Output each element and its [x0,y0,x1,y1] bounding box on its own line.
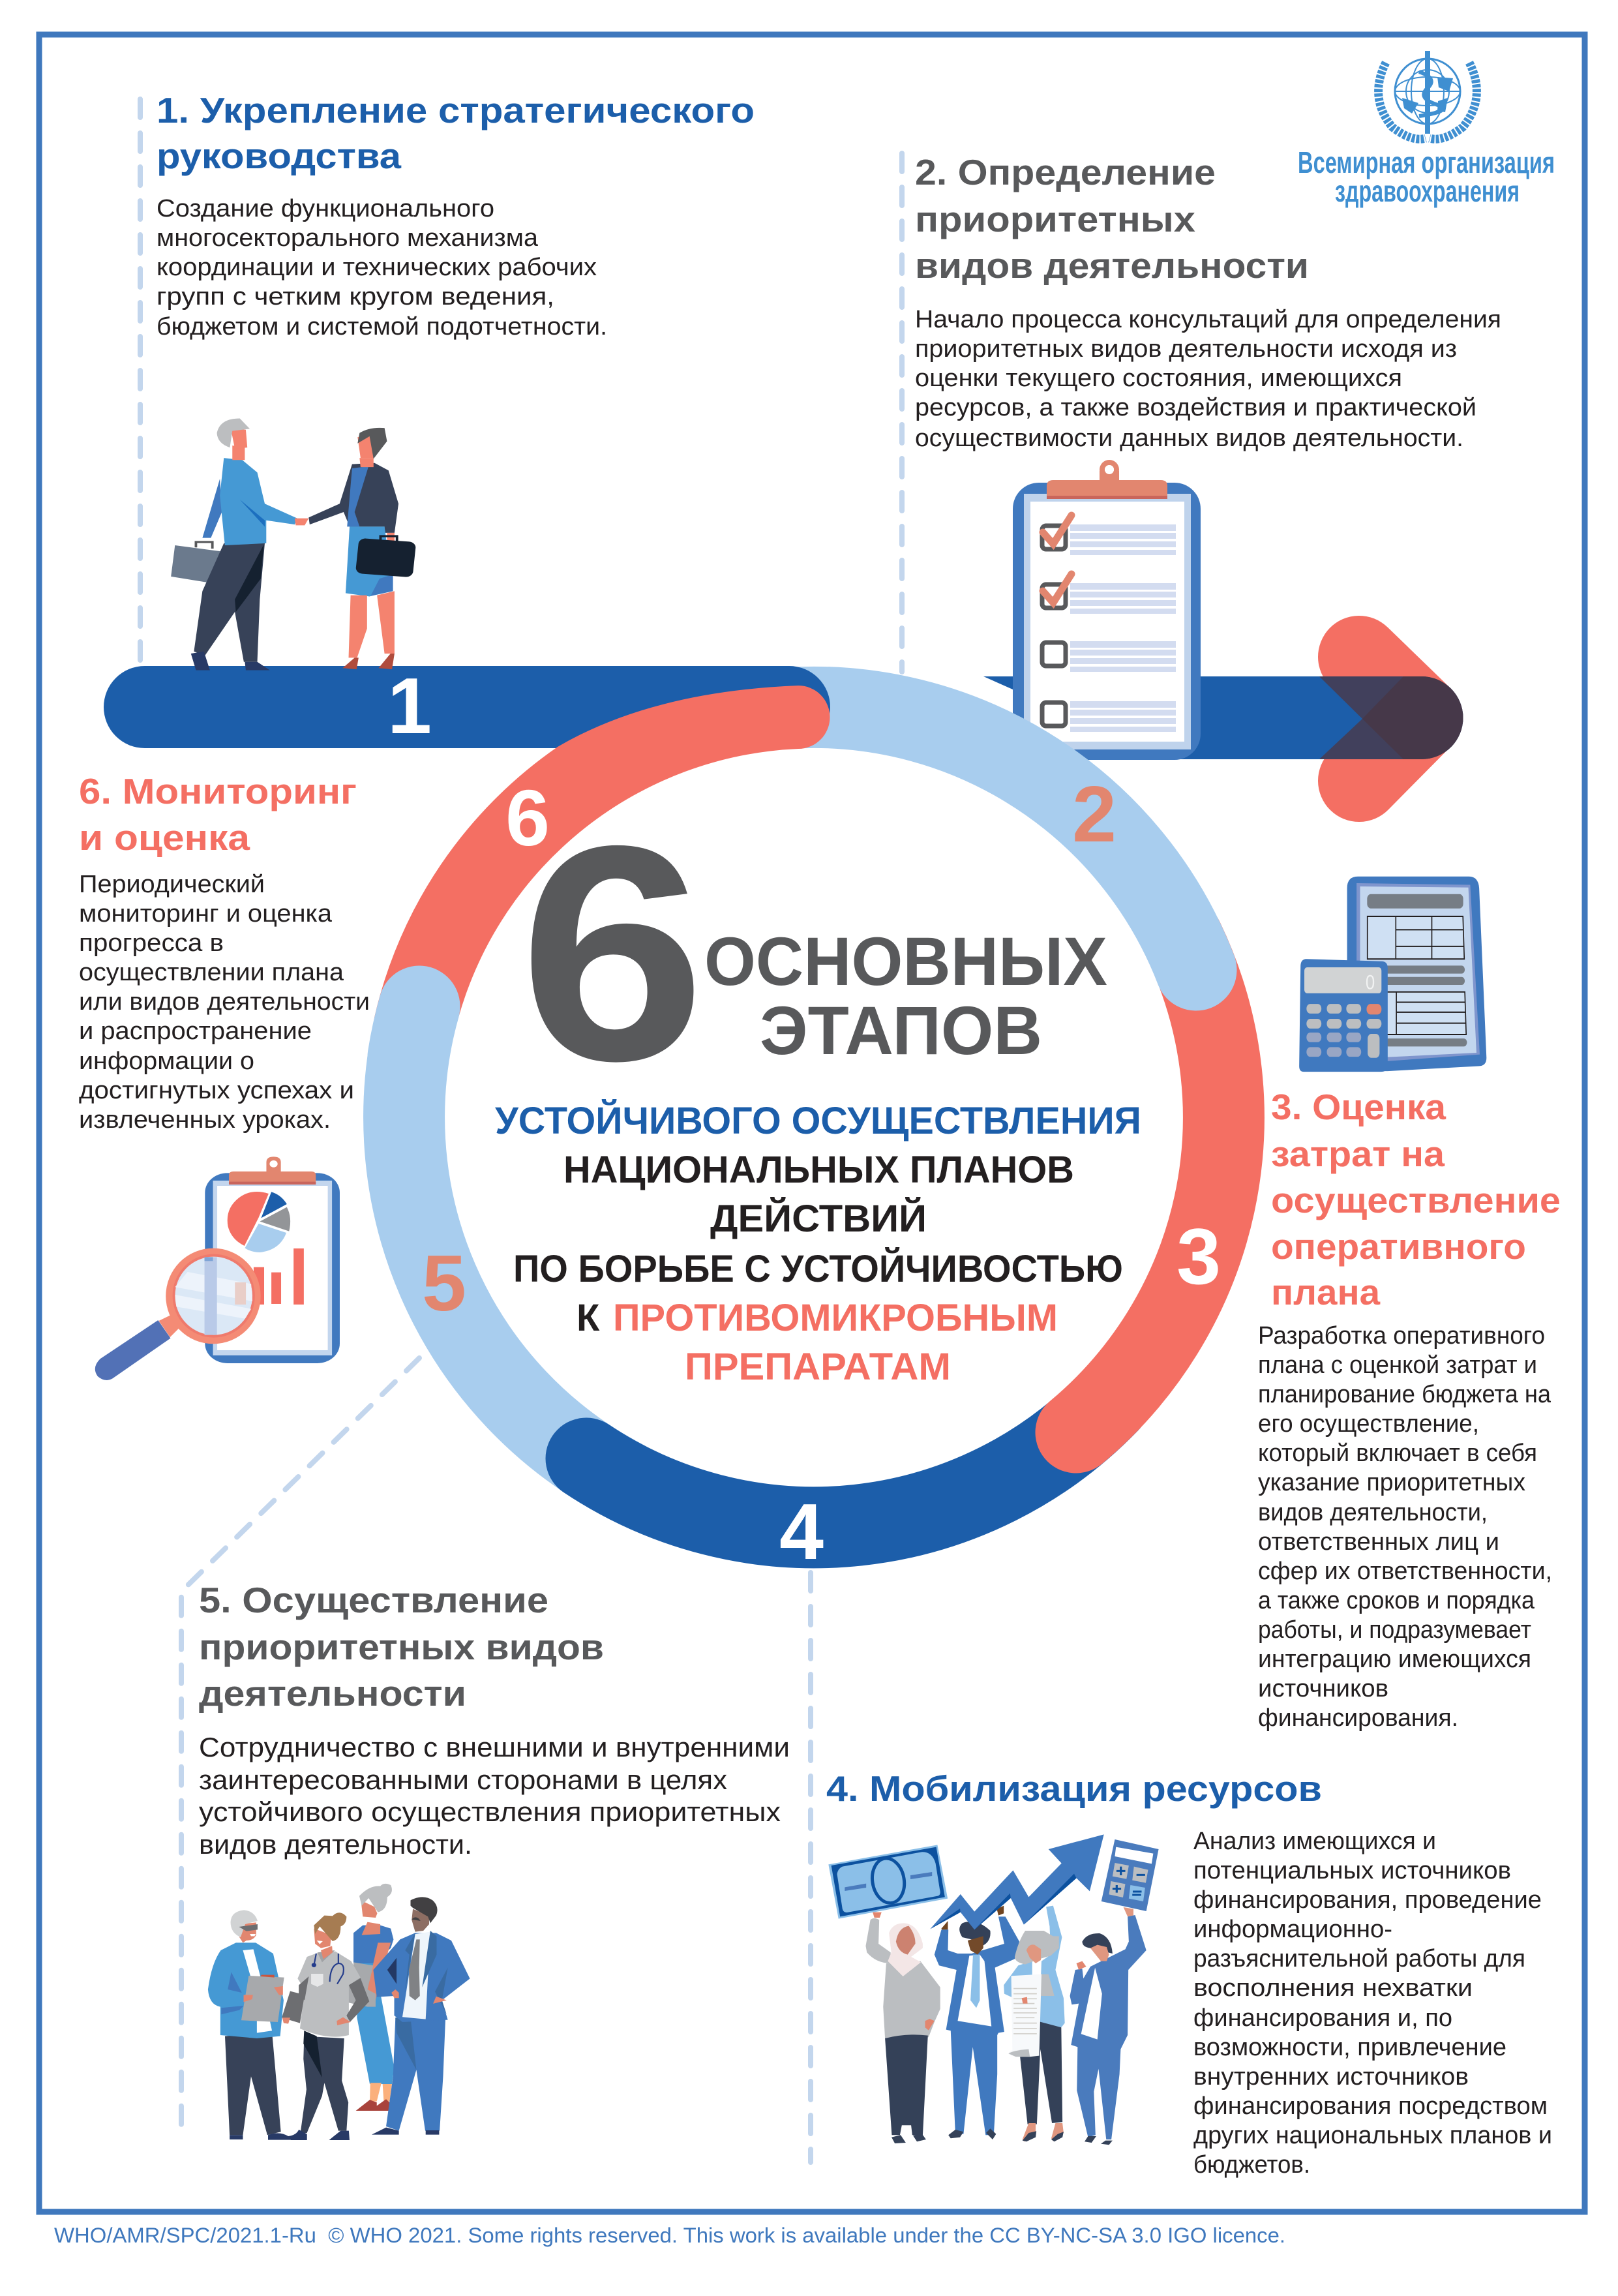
body text 6 [79,871,370,1134]
body text 6: мониторинг и оценка [79,900,333,928]
woman with grey bun [348,1884,395,2111]
subtitle: ПРОТИВОМИКРОБНЫМ [613,1297,1058,1339]
logo text: здравоохранения [1335,174,1520,208]
body text 3: его осуществление, [1258,1410,1479,1438]
panel: step 3 [1258,1087,1561,1732]
body text 6: Периодический [79,871,265,898]
illustration: people raising money, arrow and calculator [828,1834,1159,2145]
body text 2: приоритетных видов деятельности исходя из [915,335,1457,363]
heading 6 [79,771,357,858]
big numeral 6: 6 [519,782,706,1125]
body text 6: достигнутых успехах и [79,1077,354,1104]
heading 3: осуществление [1271,1180,1561,1220]
panel: step 6 [79,771,370,1134]
body text 3: плана с оценкой затрат и [1258,1352,1537,1379]
body text 4: восполнения нехватки [1193,1974,1473,2002]
body text 3: указание приоритетных [1258,1469,1525,1496]
body text 1 [157,195,607,340]
icon: report with magnifier [95,1156,340,1380]
panel: step 2 [915,152,1501,452]
arrow: timeline bar with chevron head [983,657,1463,781]
title word: этапов: ЭТАПОВ [760,993,1042,1069]
body text 4: информационно- [1193,1916,1392,1943]
logo: WHO emblem [1379,51,1476,139]
body text 2 [915,306,1501,452]
icon: checklist clipboard [1013,460,1201,760]
body text 5: Сотрудничество с внешними и внутренними [199,1732,790,1762]
heading 4: 4. Мобилизация ресурсов [826,1768,1322,1809]
heading 3: затрат на [1271,1134,1445,1174]
icon: calculator and spreadsheet [1299,877,1486,1072]
panel: step 5 [199,1580,790,1860]
subtitle: ПО БОРЬБЕ С УСТОЙЧИВОСТЬЮ [513,1248,1123,1290]
body text 6: прогресса в [79,929,224,957]
body text 4: других национальных планов и [1193,2122,1552,2149]
icon: calculator and spreadsheet: 0 [1366,971,1375,994]
body text 1: многосекторального механизма [157,224,539,252]
calculator sign [1101,1839,1159,1911]
body text 1: бюджетом и системой подотчетности. [157,313,607,340]
ring segment 2 [770,707,1196,970]
body text 5: видов деятельности. [199,1829,472,1860]
body text 4: потенциальных источников [1193,1857,1511,1884]
body text 4: финансирования и, по [1193,2004,1452,2032]
heading 1 [157,90,755,176]
heading 6: 6. Мониторинг [79,771,357,811]
subtitle: НАЦИОНАЛЬНЫХ ПЛАНОВ [563,1149,1074,1191]
man in blue suit [372,1897,470,2135]
body text 2: оценки текущего состояния, имеющихся [915,365,1402,392]
body text 3: интеграцию имеющихся [1258,1646,1531,1673]
ring number 5: 5 [422,1239,466,1327]
heading 2: видов деятельности [915,245,1309,286]
body text 6: или видов деятельности [79,988,370,1016]
body text 3: источников [1258,1675,1388,1702]
panel: step 4 [826,1768,1552,2179]
ring segment 6 [374,686,830,1018]
body text 3: сфер их ответственности, [1258,1558,1552,1585]
banknote [828,1845,948,1919]
body text 1: координации и технических рабочих [157,254,597,281]
body text 3: планирование бюджета на [1258,1381,1551,1408]
timeline bar 1 [145,666,789,748]
heading 3: оперативного [1271,1226,1526,1267]
heading 5 [199,1580,604,1714]
subtitle: К [577,1297,600,1339]
ring number 3: 3 [1176,1212,1221,1301]
ring segment 5 [404,1006,624,1481]
subtitle: ДЕЙСТВИЙ [710,1198,927,1240]
heading 3: плана [1271,1272,1380,1312]
body text 4: разъяснительной работы для [1193,1945,1525,1972]
body text 4: финансирования, проведение [1193,1886,1542,1914]
body text 5 [199,1732,790,1860]
body text 4 [1193,1828,1552,2179]
body text 1: Создание функционального [157,195,494,222]
body text 3: работы, и подразумевает [1258,1616,1531,1644]
heading 3: 3. Оценка [1271,1087,1446,1127]
body text 4: Анализ имеющихся и [1193,1828,1436,1855]
body text 5: заинтересованными сторонами в целях [199,1764,727,1795]
body text 3: ответственных лиц и [1258,1528,1499,1556]
body text 3: видов деятельности, [1258,1499,1488,1526]
ring number 6: 6 [505,774,550,862]
heading 2 [915,152,1309,286]
heading 6: и оценка [79,817,250,858]
title word: основных: ОСНОВНЫХ [704,924,1107,1000]
heading 2: приоритетных [915,199,1195,239]
body text 1: групп с четким кругом ведения, [157,283,554,310]
illustration: team of four [208,1884,470,2140]
body text 6: извлеченных уроках. [79,1106,331,1134]
body text 3: Разработка оперативного [1258,1322,1545,1350]
heading 1: 1. Укрепление стратегического [157,90,755,130]
body text 3 [1258,1322,1552,1732]
body text 6: и распространение [79,1018,312,1045]
subtitle: УСТОЙЧИВОГО ОСУЩЕСТВЛЕНИЯ [495,1100,1141,1142]
ring number 4: 4 [779,1487,824,1576]
woman doctor [282,1912,369,2140]
older man with clipboard [208,1910,307,2140]
body text 4: финансирования посредством [1193,2092,1548,2120]
illustration: handshake [171,418,416,670]
heading 1: руководства [157,136,401,176]
ring number 2: 2 [1072,770,1116,858]
body text 4: внутренних источников [1193,2063,1469,2091]
heading 5: приоритетных видов [199,1627,604,1667]
ring segment 3 [1076,939,1223,1432]
body text 6: осуществлении плана [79,959,344,986]
body text 2: осуществимости данных видов деятельности. [915,425,1463,452]
body text 6: информации о [79,1048,254,1075]
ring segment 5 top cap [408,1006,419,1057]
ring number 1: 1 [387,661,432,750]
body text 4: бюджетов. [1193,2151,1310,2179]
heading 2: 2. Определение [915,152,1216,192]
zigzag arrow [930,1834,1104,1929]
footer credit: WHO/AMR/SPC/2021.1-Ru © WHO 2021. Some rights reserved. This work is available under the CC BY-NC-SA 3.0 IGO licence. [54,2224,1285,2247]
subtitle [495,1100,1141,1388]
logo text [1298,145,1555,208]
body text 3: финансирования. [1258,1704,1458,1732]
body text 2: ресурсов, а также воздействия и практической [915,394,1476,421]
heading 5: деятельности [199,1673,466,1714]
body text 4: возможности, привлечение [1193,2034,1506,2061]
heading 5: 5. Осуществление [199,1580,548,1620]
body text 2: Начало процесса консультаций для определения [915,306,1501,333]
panel: step 1 [157,90,755,340]
heading 3 [1271,1087,1561,1312]
body text 5: устойчивого осуществления приоритетных [199,1796,781,1827]
subtitle: ПРЕПАРАТАМ [685,1346,951,1388]
ring segment 4 [586,1402,1109,1528]
centre title [495,782,1141,1388]
body text 3: а также сроков и порядка [1258,1587,1535,1614]
body text 3: который включает в себя [1258,1440,1537,1467]
